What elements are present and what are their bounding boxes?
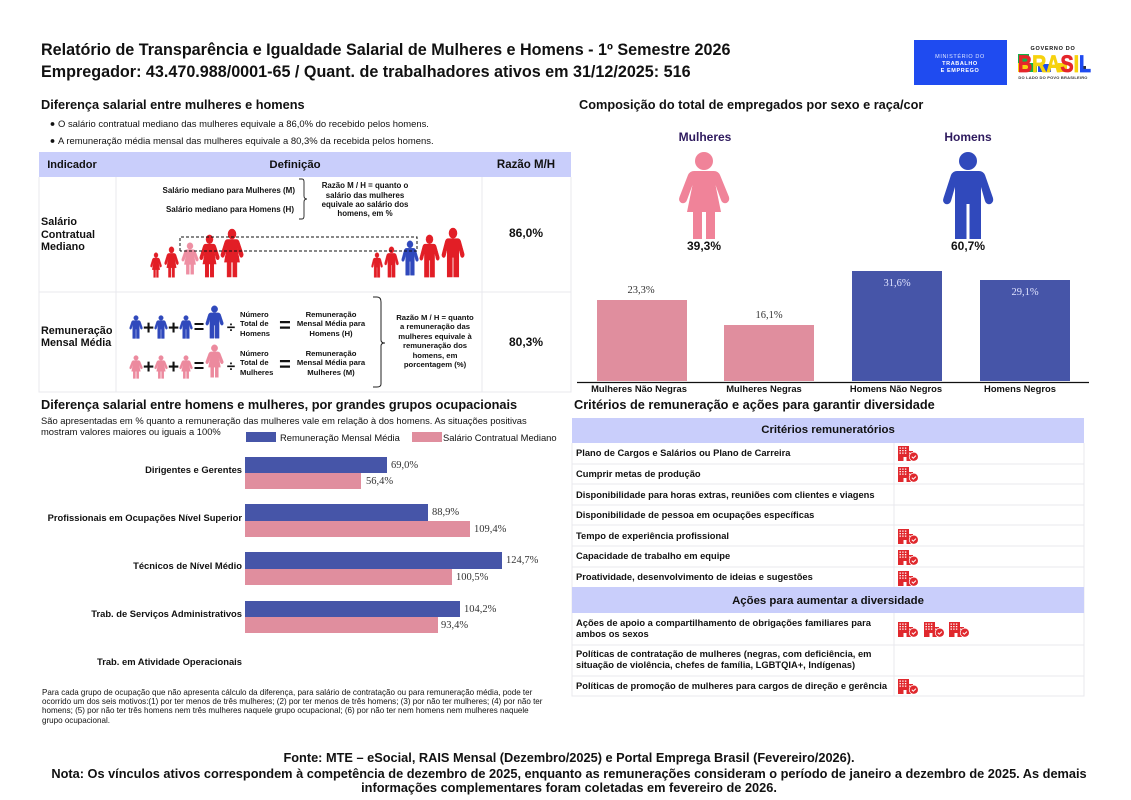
section header: ações: Ações para aumentar a diversidade <box>732 595 924 607</box>
legend: Salário Contratual Mediano <box>443 432 557 443</box>
text block: fonte e nota: Nota: Os vínculos ativos correspondem à competência de dezembro de 2025, enquanto as remunerações consideram o período de janeiro a dezembro de 2025. As demais <box>51 766 1087 781</box>
bar chart: composição por sexo e raça/cor: Mulheres Não Negras <box>591 383 687 394</box>
definition text: razão remuneração: mulheres equivale à <box>398 332 472 341</box>
panel: tabela de indicadores <box>39 152 571 392</box>
logo: Governo do Brasil: BRASIL <box>1018 51 1091 78</box>
definition text: razão remuneração: a remuneração das <box>400 322 470 331</box>
value: 80,3%: 80,3% <box>509 335 543 349</box>
action rows <box>576 618 888 691</box>
group: atividade operacional: Trab. em Atividade Operacionais <box>97 656 242 667</box>
group: técnicos de nível médio: Técnicos de Nível Médio <box>133 560 242 571</box>
bar chart: composição por sexo e raça/cor: Homens Negros <box>984 383 1056 394</box>
formula: homens: ÷ <box>227 319 235 336</box>
action rows: ambos os sexos <box>576 629 649 639</box>
logo: Ministério do Trabalho e Emprego: E EMPREGO <box>941 68 979 74</box>
formula: mulheres: + <box>143 357 154 378</box>
group: profissionais nível superior <box>48 504 507 537</box>
section header: critérios remuneratórios <box>572 418 1084 443</box>
row label: remuneração mensal média: Remuneração <box>41 325 113 337</box>
bar chart: composição por sexo e raça/cor: 23,3% <box>627 285 655 296</box>
criteria rows: Disponibilidade de pessoa em ocupações específicas <box>576 510 814 520</box>
criteria rows: Proatividade, desenvolvimento de ideias e sugestões <box>576 572 813 582</box>
table header <box>39 152 571 177</box>
definition text: razão remuneração: porcentagem (%) <box>404 360 467 369</box>
bar chart: grupos ocupacionais <box>48 457 539 667</box>
text block: nota de rodapé do gráfico: homens; (5) por não ter três homens nem três mulheres naquele grupo ocupacional; (6) por não ter nem homens nem mulheres naquele <box>42 706 529 715</box>
group: profissionais nível superior: Profissionais em Ocupações Nível Superior <box>48 512 242 523</box>
formula: homens: + <box>168 318 179 339</box>
group: dirigentes e gerentes <box>145 457 418 489</box>
heading: diferença por grupos ocupacionais: Diferença salarial entre homens e mulheres, por grandes grupos ocupacionais <box>41 397 517 412</box>
formula: mulheres <box>130 345 366 378</box>
value: 86,0%: 86,0% <box>509 226 543 240</box>
group: profissionais nível superior: 109,4% <box>474 524 507 535</box>
row label: salário contratual mediano: Contratual <box>41 229 95 241</box>
text block: fonte e nota: Fonte: MTE – eSocial, RAIS Mensal (Dezembro/2025) e Portal Emprega Brasil (Fevereiro/2026). <box>283 750 855 765</box>
bar chart: composição por sexo e raça/cor: Homens Não Negros <box>850 383 942 394</box>
formula: homens: Número <box>240 310 269 319</box>
group: dirigentes e gerentes: 69,0% <box>391 460 418 471</box>
heading: critérios: Critérios de remuneração e ações para garantir diversidade <box>574 397 935 412</box>
icons: ações adotadas <box>898 622 970 695</box>
text block: nota de rodapé do gráfico: Para cada grupo de ocupação que não apresenta cálculo da diferença, para salário de contratação ou para remuneração média, pode ter <box>42 688 533 697</box>
logo: Ministério do Trabalho e Emprego: MINISTÉRIO DO <box>935 53 985 60</box>
bar chart: composição por sexo e raça/cor <box>577 271 1089 394</box>
text block: explicação: mostram valores maiores ou iguais a 100% <box>41 426 221 437</box>
definition text: razão remuneração: remuneração dos <box>403 341 467 350</box>
text block: bullets <box>51 119 434 147</box>
formula: mulheres: Mulheres <box>240 368 273 377</box>
formula: mulheres: ÷ <box>227 358 235 375</box>
title <box>41 41 730 81</box>
row label: salário contratual mediano <box>41 216 95 253</box>
text block: bullets: O salário contratual mediano das mulheres equivale a 86,0% do recebido pelos homens. <box>58 119 429 130</box>
formula: homens <box>130 306 366 339</box>
logo: Governo do Brasil: GOVERNO DO <box>1031 46 1075 52</box>
group: técnicos de nível médio: 124,7% <box>506 555 539 566</box>
logo: Ministério do Trabalho e Emprego <box>914 40 1007 85</box>
action rows: Políticas de contratação de mulheres (negras, com deficiência, em <box>576 649 871 659</box>
formula: homens: Homens (H) <box>309 329 353 338</box>
action rows: Políticas de promoção de mulheres para cargos de direção e gerência <box>576 681 888 691</box>
formula: mulheres: Total de <box>240 358 269 367</box>
heading: diferença salarial: Diferença salarial entre mulheres e homens <box>41 97 305 112</box>
definition text: salário mediano: Salário mediano para Homens (H) <box>166 205 294 214</box>
row label: salário contratual mediano: Salário <box>41 216 77 228</box>
title: Relatório de Transparência e Igualdade Salarial de Mulheres e Homens - 1º Semestre 2026 <box>41 41 730 59</box>
row label: remuneração mensal média <box>41 325 113 349</box>
criteria rows: Capacidade de trabalho em equipe <box>576 551 730 561</box>
group: serviços administrativos: 104,2% <box>464 604 497 615</box>
criteria rows: Disponibilidade para horas extras, reuniões com clientes e viagens <box>576 490 875 500</box>
definition text: salário mediano: Razão M / H = quanto o <box>322 181 408 190</box>
panel: tabela de critérios <box>572 418 1084 696</box>
icon: mulheres 39,3% <box>679 130 732 253</box>
definition text: salário mediano: homens, em % <box>337 209 393 218</box>
group: dirigentes e gerentes: 56,4% <box>366 476 393 487</box>
definition text: salário mediano <box>163 179 409 219</box>
criteria rows: Plano de Cargos e Salários ou Plano de Carreira <box>576 448 791 458</box>
formula: homens: Remuneração <box>306 310 357 319</box>
criteria rows: Cumprir metas de produção <box>576 469 701 479</box>
formula: homens: + <box>143 318 154 339</box>
section header: ações <box>572 587 1084 613</box>
formula: mulheres: Número <box>240 349 269 358</box>
definition text: razão remuneração <box>373 297 474 387</box>
bar chart: composição por sexo e raça/cor: 16,1% <box>755 310 783 321</box>
formula: mulheres: + <box>168 357 179 378</box>
text block: nota de rodapé do gráfico: ocorrido um dos seis motivos:(1) por ter menos de três mulheres; (2) por ter menos de três homens; (3) por não ter mulheres; (4) por não ter <box>42 697 543 706</box>
figure: fila de pessoas e mediana <box>150 228 464 277</box>
icon: mulheres 39,3%: Mulheres <box>679 130 732 144</box>
title: Empregador: 43.470.988/0001-65 / Quant. de trabalhadores ativos em 31/12/2025: 516 <box>41 63 691 81</box>
group: serviços administrativos: 93,4% <box>441 620 468 631</box>
row label: salário contratual mediano: Mediano <box>41 241 85 253</box>
action rows: situação de violência, chefes de família, LGBTQIA+, Indígenas) <box>576 660 855 670</box>
group: serviços administrativos: Trab. de Serviços Administrativos <box>91 608 242 619</box>
formula: mulheres: = <box>194 356 204 376</box>
bar chart: composição por sexo e raça/cor: 31,6% <box>883 278 911 289</box>
group: técnicos de nível médio <box>133 552 539 585</box>
text block: nota de rodapé do gráfico: grupo ocupacional. <box>42 716 110 725</box>
action rows: Ações de apoio a compartilhamento de obrigações familiares para <box>576 618 872 628</box>
section header: critérios remuneratórios: Critérios remuneratórios <box>761 424 895 436</box>
table header: Definição <box>269 159 321 171</box>
criteria rows: Tempo de experiência profissional <box>576 531 729 541</box>
legend <box>246 432 557 443</box>
formula: mulheres: Mulheres (M) <box>307 368 355 377</box>
icon: homens 60,7%: 60,7% <box>951 239 985 253</box>
icon: mulheres 39,3%: 39,3% <box>687 239 721 253</box>
table header: Razão M/H <box>497 159 555 171</box>
bar chart: composição por sexo e raça/cor: 29,1% <box>1011 287 1039 298</box>
bar chart: composição por sexo e raça/cor: Mulheres Negras <box>726 383 802 394</box>
formula: mulheres: = <box>279 354 291 376</box>
heading: composição: Composição do total de empregados por sexo e raça/cor <box>579 97 923 112</box>
text block: nota de rodapé do gráfico <box>42 688 543 725</box>
text block: explicação: São apresentadas em % quanto a remuneração das mulheres vale em relação à dos homens. As situações positivas <box>41 415 527 426</box>
definition text: salário mediano: equivale ao salário dos <box>322 200 409 209</box>
criteria rows <box>576 448 875 582</box>
definition text: salário mediano: Salário mediano para Mulheres (M) <box>163 186 295 195</box>
formula: homens: = <box>279 315 291 337</box>
icons: critérios adotados <box>898 446 919 587</box>
group: técnicos de nível médio: 100,5% <box>456 572 489 583</box>
formula: mulheres: Remuneração <box>306 349 357 358</box>
formula: homens: Homens <box>240 329 270 338</box>
text block: fonte e nota <box>51 750 1087 795</box>
definition text: razão remuneração: homens, em <box>413 351 458 360</box>
formula: mulheres: Mensal Média para <box>297 358 366 367</box>
icon: homens 60,7% <box>943 130 993 253</box>
table header: Indicador <box>47 159 97 171</box>
legend: Remuneração Mensal Média <box>280 432 401 443</box>
logo: Governo do Brasil: DO LADO DO POVO BRASILEIRO <box>1018 75 1088 80</box>
text block: fonte e nota: informações complementares foram coletadas em fevereiro de 2026. <box>361 780 777 795</box>
formula: homens: Mensal Média para <box>297 319 366 328</box>
text block: bullets: A remuneração média mensal das mulheres equivale a 80,3% da recebida pelos homens. <box>58 136 434 147</box>
logo: Ministério do Trabalho e Emprego: TRABALHO <box>942 61 978 67</box>
formula: homens: Total de <box>240 319 269 328</box>
group: serviços administrativos <box>91 601 497 633</box>
formula: homens: = <box>194 317 204 337</box>
icon: homens 60,7%: Homens <box>944 130 992 144</box>
group: dirigentes e gerentes: Dirigentes e Gerentes <box>145 464 242 475</box>
text block: explicação <box>41 415 527 437</box>
row label: remuneração mensal média: Mensal Média <box>41 337 112 349</box>
definition text: razão remuneração: Razão M / H = quanto <box>396 313 474 322</box>
group: profissionais nível superior: 88,9% <box>432 507 459 518</box>
definition text: salário mediano: salário das mulheres <box>326 191 405 200</box>
